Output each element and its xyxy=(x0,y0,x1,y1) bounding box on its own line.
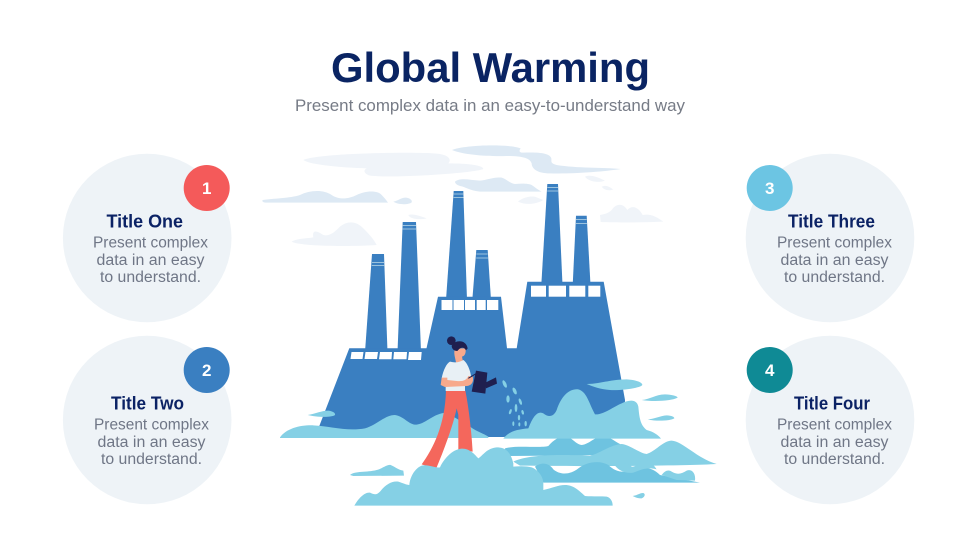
panel: title two xyxy=(63,336,232,504)
text: title four body: Present complex xyxy=(777,416,892,434)
text: title three body: data in an easy xyxy=(780,252,889,269)
text: title four body: data in an easy xyxy=(780,434,889,451)
illustration: rear clouds xyxy=(280,379,717,498)
text: title one body xyxy=(93,234,208,286)
text: title three body: Present complex xyxy=(777,234,892,252)
text: title one body: to understand. xyxy=(100,269,201,286)
panel: title one xyxy=(63,154,232,322)
badge 1 xyxy=(184,165,230,211)
text: title two body: data in an easy xyxy=(98,434,206,451)
illustration: smoke clouds xyxy=(262,145,663,246)
heading: title two: Title Two xyxy=(111,394,184,414)
badge 1: 1 xyxy=(202,179,211,198)
illustration: front cloud xyxy=(354,447,613,506)
heading: title three: Title Three xyxy=(788,212,875,232)
chimney stripes xyxy=(372,188,587,266)
badge 4 xyxy=(747,347,793,393)
text: title three body xyxy=(777,234,892,286)
heading: title one: Title One xyxy=(106,212,183,232)
badge 2: 2 xyxy=(202,361,211,380)
panel: title three xyxy=(746,154,914,322)
badge 3: 3 xyxy=(765,179,774,198)
text: title two body xyxy=(94,416,209,468)
text: title three body: to understand. xyxy=(784,269,885,286)
badge 3 xyxy=(747,165,793,211)
illustration: factory xyxy=(319,184,625,437)
factory windows xyxy=(350,286,600,360)
title: Global Warming xyxy=(331,44,650,91)
text: title four body: to understand. xyxy=(784,451,885,468)
illustration: woman with watering can xyxy=(422,336,527,469)
text: title two body: Present complex xyxy=(94,416,209,434)
subtitle: Present complex data in an easy-to-understand way xyxy=(295,96,685,115)
panel: title four xyxy=(746,336,914,504)
heading: title four: Title Four xyxy=(794,394,870,414)
badge 4: 4 xyxy=(765,361,775,380)
badge 2 xyxy=(184,347,230,393)
text: title one body: data in an easy xyxy=(96,252,205,269)
text: title two body: to understand. xyxy=(101,451,202,468)
text: title one body: Present complex xyxy=(93,234,208,252)
text: title four body xyxy=(777,416,892,468)
